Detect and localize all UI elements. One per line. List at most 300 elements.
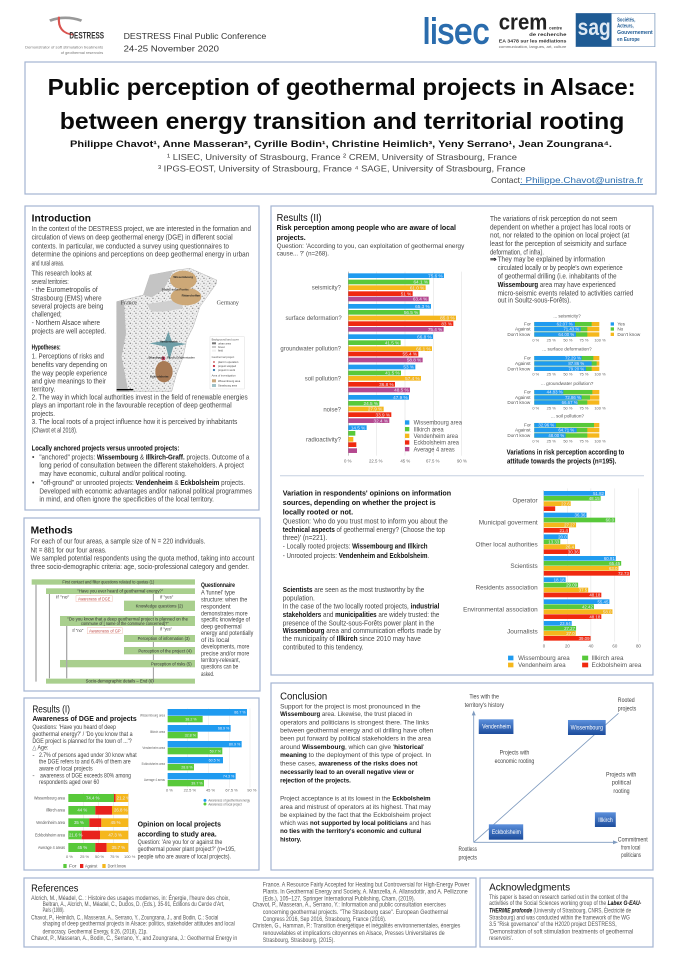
stacked charts: risk perception by attitude: Don't know	[507, 433, 531, 438]
stacked charts: risk perception by attitude: 66.67 %	[562, 400, 578, 405]
questionnaire explanation: energy and potentially	[201, 631, 253, 637]
questionnaire flow chart: If "no"	[72, 628, 84, 634]
bar chart: trust in information sources: 55.45	[597, 599, 609, 604]
text: scientists most trustworthy: In the case of the two locally rooted projects, industrial	[283, 604, 439, 611]
stacked charts: risk perception by attitude: Don't know	[507, 400, 531, 405]
awareness text: geothermal energy?' / 'Do you know that a	[32, 731, 133, 738]
conclusion text: Support for the project is most pronounced in the	[280, 703, 421, 710]
bar chart: awareness by area: 90 %	[247, 787, 257, 792]
awareness text: the DGE refers to and 6.4% of them are	[39, 759, 131, 766]
stacked charts: risk perception by attitude: 44.83 %	[547, 390, 563, 395]
bar chart: risk perception: 32.4 %	[373, 418, 388, 423]
bar chart: risk perception: 58.8 %	[407, 358, 421, 363]
territories text: several territories:	[32, 279, 69, 286]
bar chart: awareness by area: 86.7 %	[234, 711, 246, 715]
stacked chart: opinion by area: 47.3 %	[108, 832, 122, 837]
text: variations of risk perception: They may be explained by information	[498, 257, 605, 264]
subheading: risk perception	[277, 223, 456, 242]
text: variations of risk perception: ⇒	[490, 257, 497, 264]
bar chart: trust in information sources: Illkirch area	[592, 656, 624, 662]
stacked chart: opinion by area: 26.8 %	[114, 808, 128, 813]
subheading: information sources: sources, depending on whether the project is	[283, 498, 436, 507]
bar chart: risk perception	[280, 272, 467, 463]
contact	[491, 175, 643, 185]
hypotheses: plays an important role in the favourable reception of deep geothermal	[32, 403, 232, 410]
bar chart: risk perception: 66.1 %	[416, 346, 431, 351]
text: scientists most trustworthy	[283, 587, 441, 651]
conclusion text: be explained by the fact that the Eckbolsheim project	[280, 812, 431, 819]
bar chart: trust in information sources: 40	[589, 644, 594, 649]
bar chart: awareness by area: 32.8 %	[185, 733, 197, 737]
logo: SAGE: sag	[578, 13, 611, 40]
question text: information sources	[283, 518, 448, 560]
bar chart: trust in information sources: Vendenheim area	[518, 663, 566, 669]
caption: opinion on local projects	[138, 820, 236, 861]
bar chart: trust in information sources: 26.4	[566, 544, 575, 549]
bar chart: trust in information sources: 42.42	[582, 604, 593, 609]
awareness text: DGE project is planned for the town of ...'?	[32, 738, 132, 745]
question text: information sources: - Unrooted projects: Vendenheim and Eckbolsheim.	[283, 553, 429, 560]
text: variations of risk perception: not, nor related to the opinion on local project (at	[490, 233, 629, 240]
stacked charts: risk perception by attitude: Don't know	[617, 332, 641, 337]
methods text	[31, 538, 254, 571]
anchored versus unrooted projects: Locally anchored projects versus unrooted projects:	[32, 446, 179, 453]
bar chart: trust in information sources: 48.18	[589, 614, 601, 619]
text: scientists most trustworthy: presence of the Soultz-sous-Forêts power plant in the	[283, 620, 434, 627]
stacked charts: risk perception by attitude: ... surface deformation?	[542, 347, 592, 352]
stacked chart: opinion by area: 50 %	[95, 854, 105, 859]
stacked charts: risk perception by attitude: 25 %	[547, 438, 556, 443]
questionnaire explanation: deep geothermal	[201, 624, 242, 630]
stacked chart: opinion by area: Average 4 areas	[38, 845, 66, 850]
hypotheses: 2. The way in which local authorities invest in the field of renewable energies	[32, 394, 248, 401]
title: between energy transition and territorial rooting	[60, 108, 624, 134]
questionnaire flow chart: First contact and filter questions related to quotas (1)	[62, 579, 155, 585]
questionnaire explanation: territory-relevant,	[201, 658, 240, 664]
acknowledgments text	[489, 895, 642, 942]
bar chart: awareness by area: 74.3 %	[223, 775, 235, 779]
map legend: Background land cover	[212, 338, 239, 342]
reference list: (Eds.), 105–127, Springer International Publishing, Cham, (2019).	[263, 896, 415, 902]
stacked chart: opinion by area: Illkirch area	[46, 808, 65, 813]
diagram: territorial rooting of projects: Vendenheim	[482, 724, 511, 731]
territories text: several projects are being	[32, 304, 103, 311]
diagram: territorial rooting of projects: Ties with the	[469, 694, 499, 701]
bar chart: risk perception: 64.1 %	[413, 280, 428, 285]
map legend: project in work	[218, 368, 236, 372]
bar chart: trust in information sources: 60.0	[606, 518, 615, 523]
diagram: territorial rooting of projects: Projects with	[500, 750, 530, 757]
stacked charts: risk perception by attitude: 50 %	[563, 372, 573, 377]
intro text: In the context of the DESTRESS project, we are interested in the formation and	[32, 226, 251, 233]
bar chart: risk perception: 51 %	[401, 291, 411, 296]
stacked charts: risk perception by attitude: For	[524, 390, 531, 395]
text: variations of risk perception	[490, 216, 633, 305]
bar chart: trust in information sources: Municipal goverment	[479, 519, 538, 526]
question text: information sources: technical aspects of geothermal energy? (Choose the top	[283, 527, 445, 534]
conference name and date	[124, 32, 267, 54]
bar chart: trust in information sources: 18.18	[554, 577, 565, 582]
methods text: three socio-demographic criteria: age, socio-professional category and gender.	[31, 564, 249, 571]
bar chart: trust in information sources: 72.73	[618, 571, 630, 576]
stacked chart: opinion by area: 45 %	[111, 820, 121, 825]
anchored versus unrooted projects: •	[32, 480, 35, 487]
bar chart: trust in information sources	[463, 488, 642, 669]
acknowledgments text: activities of the Social Sciences working group of the Labex G-EAU-	[489, 901, 642, 907]
hypotheses: benefits vary depending on	[32, 362, 107, 369]
question text: cause... ?' (n=268).	[277, 251, 329, 258]
territories text: challenged;	[32, 312, 62, 319]
bar chart: risk perception: 45 %	[400, 458, 410, 463]
stacked charts: risk perception by attitude: 25 %	[547, 372, 556, 377]
stacked charts: risk perception by attitude: Against	[515, 361, 531, 366]
stacked charts: risk perception by attitude: 25 %	[547, 405, 556, 410]
awareness text: respondents aged over 60	[39, 779, 100, 786]
questionnaire explanation: asked.	[201, 672, 215, 678]
hypotheses: and give meanings to their	[32, 379, 107, 386]
question text: information sources: three)' (n=221).	[283, 535, 327, 542]
header logo: DESTRESS: of geothermal reservoirs	[61, 51, 103, 55]
stacked charts: risk perception by attitude: 71.43 %	[563, 327, 579, 332]
hypotheses: Hypotheses:	[32, 345, 61, 352]
bar chart: risk perception: soil pollution?	[305, 377, 342, 383]
questionnaire explanation: specific knowledge of	[201, 618, 250, 624]
header logo: DESTRESS: DESTRESS	[69, 32, 104, 41]
map of study area: Germany	[217, 300, 239, 306]
map of study area: Wissembourg	[173, 275, 193, 279]
reference list: Chavot, P., Masseran, A., Bodin, C., Serrano, Y., and Zoungrana, J.: Geothermal Energy in	[31, 936, 237, 942]
stacked charts: risk perception by attitude: For	[524, 423, 531, 428]
bar chart: risk perception: 65.3 %	[415, 304, 430, 309]
stacked charts: risk perception by attitude: Against	[515, 428, 531, 433]
reference list: Chavot, P., Masseran, A., Serrano, Y.: Information and public consultation exercises	[252, 902, 446, 908]
subheading: risk perception: Risk perception among people who are aware of local	[277, 223, 456, 232]
anchored versus unrooted projects: in mind, and often ignore the specificities of the local territory.	[39, 496, 214, 503]
text: scientists most trustworthy: contributed to this tendency.	[283, 644, 364, 651]
stacked charts: risk perception by attitude: Don't know	[507, 332, 531, 337]
text: variations of risk perception: out in Soultz-sous-Forêts).	[498, 298, 571, 305]
bar chart: risk perception: seismicity?	[312, 286, 342, 292]
questionnaire explanation: structure: when the	[201, 598, 248, 604]
stacked charts: risk perception by attitude: 100 %	[594, 405, 606, 410]
questionnaire explanation	[201, 583, 253, 678]
stacked charts: risk perception by attitude: Against	[515, 327, 531, 332]
bar chart: risk perception: 90 %	[457, 458, 467, 463]
stacked charts: risk perception by attitude: For	[524, 356, 531, 361]
logo: CREM: centre	[549, 26, 562, 31]
map legend: forest	[218, 345, 225, 349]
logo: CREM: crem	[499, 10, 547, 35]
stacked charts: risk perception by attitude: ... soil pollution?	[551, 414, 584, 419]
stacked charts: risk perception by attitude: 79.20 %	[568, 366, 584, 371]
hypotheses: 1. Perceptions of risks and	[32, 354, 104, 361]
stacked chart: opinion by area	[34, 793, 136, 870]
diagram: territorial rooting of projects: territory's history	[465, 702, 505, 709]
bar chart: trust in information sources: Operator	[512, 498, 539, 505]
text: variations of risk perception: of geothermal drilling (i.e. inhabitants of the	[498, 273, 617, 280]
diagram: territorial rooting of projects: Wissembourg	[571, 725, 603, 732]
affiliations	[158, 152, 526, 174]
bar chart: trust in information sources: 22.6	[561, 501, 570, 506]
bar chart: risk perception: 48.5 %	[394, 388, 409, 393]
bar chart: awareness by area: Illkirch area	[150, 729, 166, 734]
logo: SAGE: en Europe	[617, 38, 640, 43]
contact: : Philippe.Chavot@unistra.fr	[520, 175, 643, 185]
stacked chart: opinion by area: 35 %	[74, 820, 84, 825]
bar chart: trust in information sources: 37.5	[579, 588, 588, 593]
subheading: awareness: Awareness of DGE and projects	[32, 714, 137, 723]
stacked charts: risk perception by attitude: 0 %	[532, 405, 540, 410]
map legend: Area of investigation	[212, 374, 236, 378]
stacked charts: risk perception by attitude: 0 %	[532, 438, 540, 443]
bar chart: awareness by area: Average 4 areas	[144, 777, 165, 782]
territories text: Strasbourg (EMS) where	[32, 295, 102, 302]
bar chart: trust in information sources: 80	[636, 644, 641, 649]
conclusion text: rejection of the projects.	[280, 777, 351, 784]
questionnaire flow chart: "Do you know that a deep geothermal project is planned on the	[67, 616, 188, 622]
panel: introduction	[25, 206, 259, 510]
reference list: Congress 2016, Sep 2016, Strasbourg, France (2016).	[263, 917, 386, 923]
questionnaire flow chart: Awareness of GP	[89, 628, 121, 633]
bar chart: trust in information sources: 27.0	[566, 631, 575, 636]
authors: Philippe Chavot¹, Anne Masseran², Cyrille Bodin¹, Christine Heimlich³, Yeny Serrano¹, Jean Zoungrana⁴.	[70, 139, 612, 149]
bar chart: trust in information sources: Journalists	[507, 628, 538, 635]
diagram: territorial rooting of projects: Rootless	[459, 846, 477, 853]
bar chart: trust in information sources: 36.36	[575, 513, 586, 518]
stacked charts: risk perception by attitude: 0 %	[532, 338, 540, 343]
text: scientists most trustworthy: Scientists are seen as the most trustworthy by the	[283, 587, 424, 594]
stacked charts: risk perception by attitude: 75 %	[579, 438, 589, 443]
stacked charts: risk perception by attitude: 48.00 %	[548, 433, 564, 438]
bar chart: risk perception: 63.4 %	[413, 297, 427, 302]
bar chart: awareness by area: Awareness of local project	[208, 801, 242, 806]
questionnaire flow chart: If "no"	[56, 595, 70, 601]
reference list: Plants. In Geothermal Energy and Society, A. Manzella, A. Allansdottir, and A. Pellizzone	[263, 889, 468, 895]
bar chart: risk perception: noise?	[323, 407, 342, 413]
bar chart: risk perception: radioactivity?	[306, 438, 342, 444]
heading: Methods: Methods	[31, 525, 73, 536]
questionnaire flow chart: commune of [ name of the commune concerned]?"	[81, 621, 169, 627]
anchored versus unrooted projects	[32, 446, 252, 503]
bar chart: risk perception: Illkirch area	[414, 427, 444, 433]
conclusion text: Wissembourg area. Likewise, the trust placed in	[280, 711, 412, 718]
bar chart: trust in information sources: 51.82	[593, 491, 605, 496]
bar chart: trust in information sources: 58.0	[603, 609, 612, 614]
anchored versus unrooted projects: •	[32, 454, 35, 461]
stacked chart: opinion by area: 44 %	[77, 808, 87, 813]
caption: opinion on local projects: people who are aware of local projects).	[138, 854, 231, 861]
bar chart: awareness by area: 67.5 %	[225, 787, 238, 792]
questionnaire flow chart: "Have you ever heard of geothermal energy?"	[77, 589, 164, 595]
questionnaire flow chart: Perception of information (3)	[138, 636, 190, 642]
bar chart: trust in information sources: Other local authorities	[476, 541, 538, 548]
stacked charts: risk perception by attitude: 50 %	[563, 438, 573, 443]
questionnaire flow chart	[32, 579, 195, 685]
questionnaire explanation: developments, more	[201, 645, 250, 651]
questionnaire explanation: demonstrates more	[201, 611, 248, 617]
hypotheses: projects.	[32, 411, 55, 418]
bar chart: trust in information sources: Eckbolsheim area	[592, 663, 642, 669]
question text: information sources: Question: 'who do you trust most to inform you about the	[283, 518, 448, 525]
subheading: risk perception: projects.	[277, 233, 306, 242]
bar chart: risk perception: 24.5 %	[363, 401, 378, 406]
text: variations of risk perception: The variations of risk perception do not seem	[490, 216, 617, 223]
panel: acknowledgments	[480, 878, 653, 947]
reference list: concerning geothermal projects. "The Strasbourg case". European Geothermal	[263, 910, 448, 916]
bar chart: risk perception: 47.9 %	[393, 395, 408, 400]
reference list	[31, 882, 470, 944]
map legend: field	[218, 349, 223, 353]
text: variations of risk perception: Wissembourg area may have experienced	[498, 282, 616, 289]
conference name and date: DESTRESS Final Public Conference	[124, 32, 267, 42]
diagram: territorial rooting of projects: political	[612, 780, 631, 787]
questionnaire flow chart: Awareness of DGE	[78, 596, 110, 601]
stacked charts: risk perception by attitude: 75 %	[579, 405, 589, 410]
bar chart: trust in information sources: 13.33	[548, 539, 560, 544]
questionnaire explanation: Questionnaire	[201, 583, 236, 589]
questionnaire explanation: of its local	[201, 638, 229, 644]
intro text: and rural areas.	[32, 260, 64, 267]
bar chart: risk perception: Eckbolsheim area	[414, 441, 460, 447]
stacked chart: opinion by area: Vendenheim area	[36, 820, 65, 825]
conclusion text: history.	[280, 836, 301, 843]
stacked charts: risk perception by attitude: 75 %	[579, 372, 589, 377]
stacked charts: risk perception by attitude: 100 %	[594, 372, 606, 377]
bar chart: trust in information sources: 48.15	[589, 496, 600, 501]
map of study area: Soultz-sous-Forêts	[162, 288, 189, 292]
reference list: democracy. Geothermal Energy, 6:26, (2018), 21p.	[43, 929, 148, 935]
diagram: territorial rooting of projects: economic rooting	[495, 758, 535, 765]
diagram: territorial rooting of projects: Projects with	[606, 772, 637, 779]
stacked chart: opinion by area: 75 %	[110, 854, 120, 859]
questionnaire explanation: questions can be	[201, 665, 239, 671]
reference list: Christen, G., Hamman, P.: Transition énergétique et inégalités environnementales, énergies	[252, 923, 461, 929]
heading: Results (I): Results (I)	[32, 704, 70, 715]
text: variations of risk perception: dependent on whether a project has local roots or	[490, 224, 632, 231]
hypotheses	[32, 345, 248, 434]
anchored versus unrooted projects: "off-ground" or unrooted projects: Vendenheim & Eckbolsheim projects.	[41, 480, 245, 487]
awareness text: -	[32, 752, 35, 759]
map of study area: France	[121, 300, 137, 306]
acknowledgments text: 3.5 "Risk governance" of the H2020 project DESTRESS,	[489, 922, 617, 928]
conclusion text: been put forward by political stakeholders in the area	[280, 736, 431, 743]
caption: opinion on local projects: geothermal power plant project?' (n=195,	[138, 846, 236, 853]
bar chart: risk perception: 22.5 %	[369, 458, 383, 463]
stacked chart: opinion by area: 74.4 %	[86, 795, 100, 800]
bar chart: risk perception: 75.6 %	[428, 273, 443, 278]
bar chart: awareness by area: 0 %	[166, 787, 173, 792]
stacked chart: opinion by area: For	[69, 864, 77, 870]
diagram: territorial rooting of projects: Eckbolsheim	[492, 829, 521, 836]
map of study area: Vendenheim	[160, 340, 178, 344]
intro text: circulation of views on deep geothermal energy (DGE) in different social	[32, 235, 233, 242]
questionnaire flow chart: Perception of risks (5)	[151, 661, 192, 667]
stacked charts: risk perception by attitude	[507, 313, 641, 443]
reference list: Paris (1999).	[43, 908, 65, 914]
diagram: territorial rooting of projects: rooting	[613, 788, 630, 795]
stacked chart: opinion by area: 0 %	[66, 854, 73, 859]
bar chart: trust in information sources: Environmental association	[463, 606, 538, 613]
conclusion text: necessarily lead to an overall negative view or	[280, 769, 414, 776]
bar chart: awareness by area: 39.7 %	[191, 781, 203, 785]
text: variations of risk perception: deformation, cf infra).	[490, 249, 544, 256]
stacked charts: risk perception by attitude: 72.86 %	[565, 395, 581, 400]
logo: SAGE: Gouvernement	[617, 31, 653, 36]
map of study area: Strasbourg	[148, 356, 164, 360]
title	[48, 74, 636, 134]
conclusion text: no ties with the territory's economic and cultural	[280, 828, 422, 835]
bar chart: awareness by area: Vendenheim area	[142, 745, 166, 750]
subheading: information sources	[283, 489, 452, 517]
stacked charts: risk perception by attitude: 50 %	[563, 405, 573, 410]
diagram: territorial rooting of projects: projects	[618, 705, 636, 712]
bar chart: risk perception: 66.8 %	[417, 334, 432, 339]
stacked charts: risk perception by attitude: 100 %	[594, 338, 606, 343]
diagram: territorial rooting of projects: Rooted	[618, 697, 635, 704]
bar chart: risk perception: 33.9 %	[375, 412, 390, 417]
caption: opinion on local projects: Opinion on local projects	[138, 820, 221, 829]
reference list: Strasbourg, Strasbourg, (2015).	[263, 938, 335, 944]
awareness text: △ Age:	[32, 745, 48, 752]
bar chart: trust in information sources: Residents association	[475, 585, 538, 592]
bar chart: trust in information sources: 60	[612, 644, 618, 649]
map legend: Wissembourg area	[218, 379, 241, 383]
hypotheses: the way people experience	[32, 370, 107, 377]
bar chart: awareness by area: 60.5 %	[209, 759, 221, 763]
bar chart: trust in information sources: 23.64	[560, 621, 571, 626]
stacked chart: opinion by area: 21.2 %	[117, 795, 130, 800]
stacked charts: risk perception by attitude: 32.96 %	[538, 423, 554, 428]
bar chart: awareness by area: 22.5 %	[184, 787, 197, 792]
questionnaire flow chart: Perception of the project (4)	[138, 648, 192, 654]
question text: information sources: - Locally rooted projects: Wissembourg and Illkirch	[283, 544, 428, 551]
territories text	[32, 271, 106, 335]
bar chart: awareness by area: Awareness of geothermal energy	[208, 798, 250, 803]
stacked chart: opinion by area: Against	[85, 864, 98, 870]
hypotheses: territory.	[32, 387, 55, 394]
bar chart: risk perception: 0 %	[344, 458, 352, 463]
bar chart: awareness by area: 45 %	[206, 787, 216, 792]
territories text: - Northern Alsace where	[32, 320, 100, 327]
map legend: Geothermal project	[212, 355, 234, 359]
bar chart: risk perception: 53 %	[403, 365, 414, 370]
caption: opinion on local projects: Question: 'Are you for or against the	[138, 839, 223, 846]
bar chart: awareness by area: Eckbolsheim area	[142, 761, 166, 766]
logo: CREM	[499, 10, 567, 49]
conclusion text: around Wissembourg, which can give 'historical'	[280, 744, 424, 751]
text: scientists most trustworthy: the municipality of Illkirch since 2010 may have	[283, 636, 421, 643]
diagram: territorial rooting of projects: projects	[459, 854, 477, 861]
conclusion text: operators and politicians is strongest there. The links	[280, 719, 430, 726]
text: variations of risk perception: micro-seismic events related to activities carried	[498, 290, 633, 297]
conclusion text: Project acceptance is at its lowest in the Eckbolsheim	[280, 796, 431, 803]
bar chart: trust in information sources: 65.45	[609, 561, 621, 566]
text: scientists most trustworthy: stakeholders and municipalities are widely trusted: the	[283, 612, 439, 619]
bar chart: risk perception: Wissembourg area	[414, 421, 463, 427]
acknowledgments text: reservoirs'.	[489, 936, 513, 942]
reference list: France. A Resource Fairly Accepted for Heating but Controversial for High-Energy Power	[263, 882, 470, 888]
bar chart: awareness by area	[140, 708, 257, 806]
diagram: territorial rooting of projects: Illkirch	[598, 817, 613, 824]
panel: references	[24, 878, 476, 947]
questionnaire explanation: A 'funnel' type	[201, 590, 236, 596]
bar chart: trust in information sources: 60.91	[604, 556, 615, 561]
diagram: territorial rooting of projects	[459, 694, 648, 861]
diagram: territorial rooting of projects: from local	[621, 844, 640, 851]
bar chart: risk perception: 83 %	[441, 321, 452, 326]
map legend	[210, 337, 244, 389]
reference list: Alcrich, M., Méadel, C. : Histoire des usages modernes, in: Énergie, l'heure des choix,	[31, 894, 230, 902]
